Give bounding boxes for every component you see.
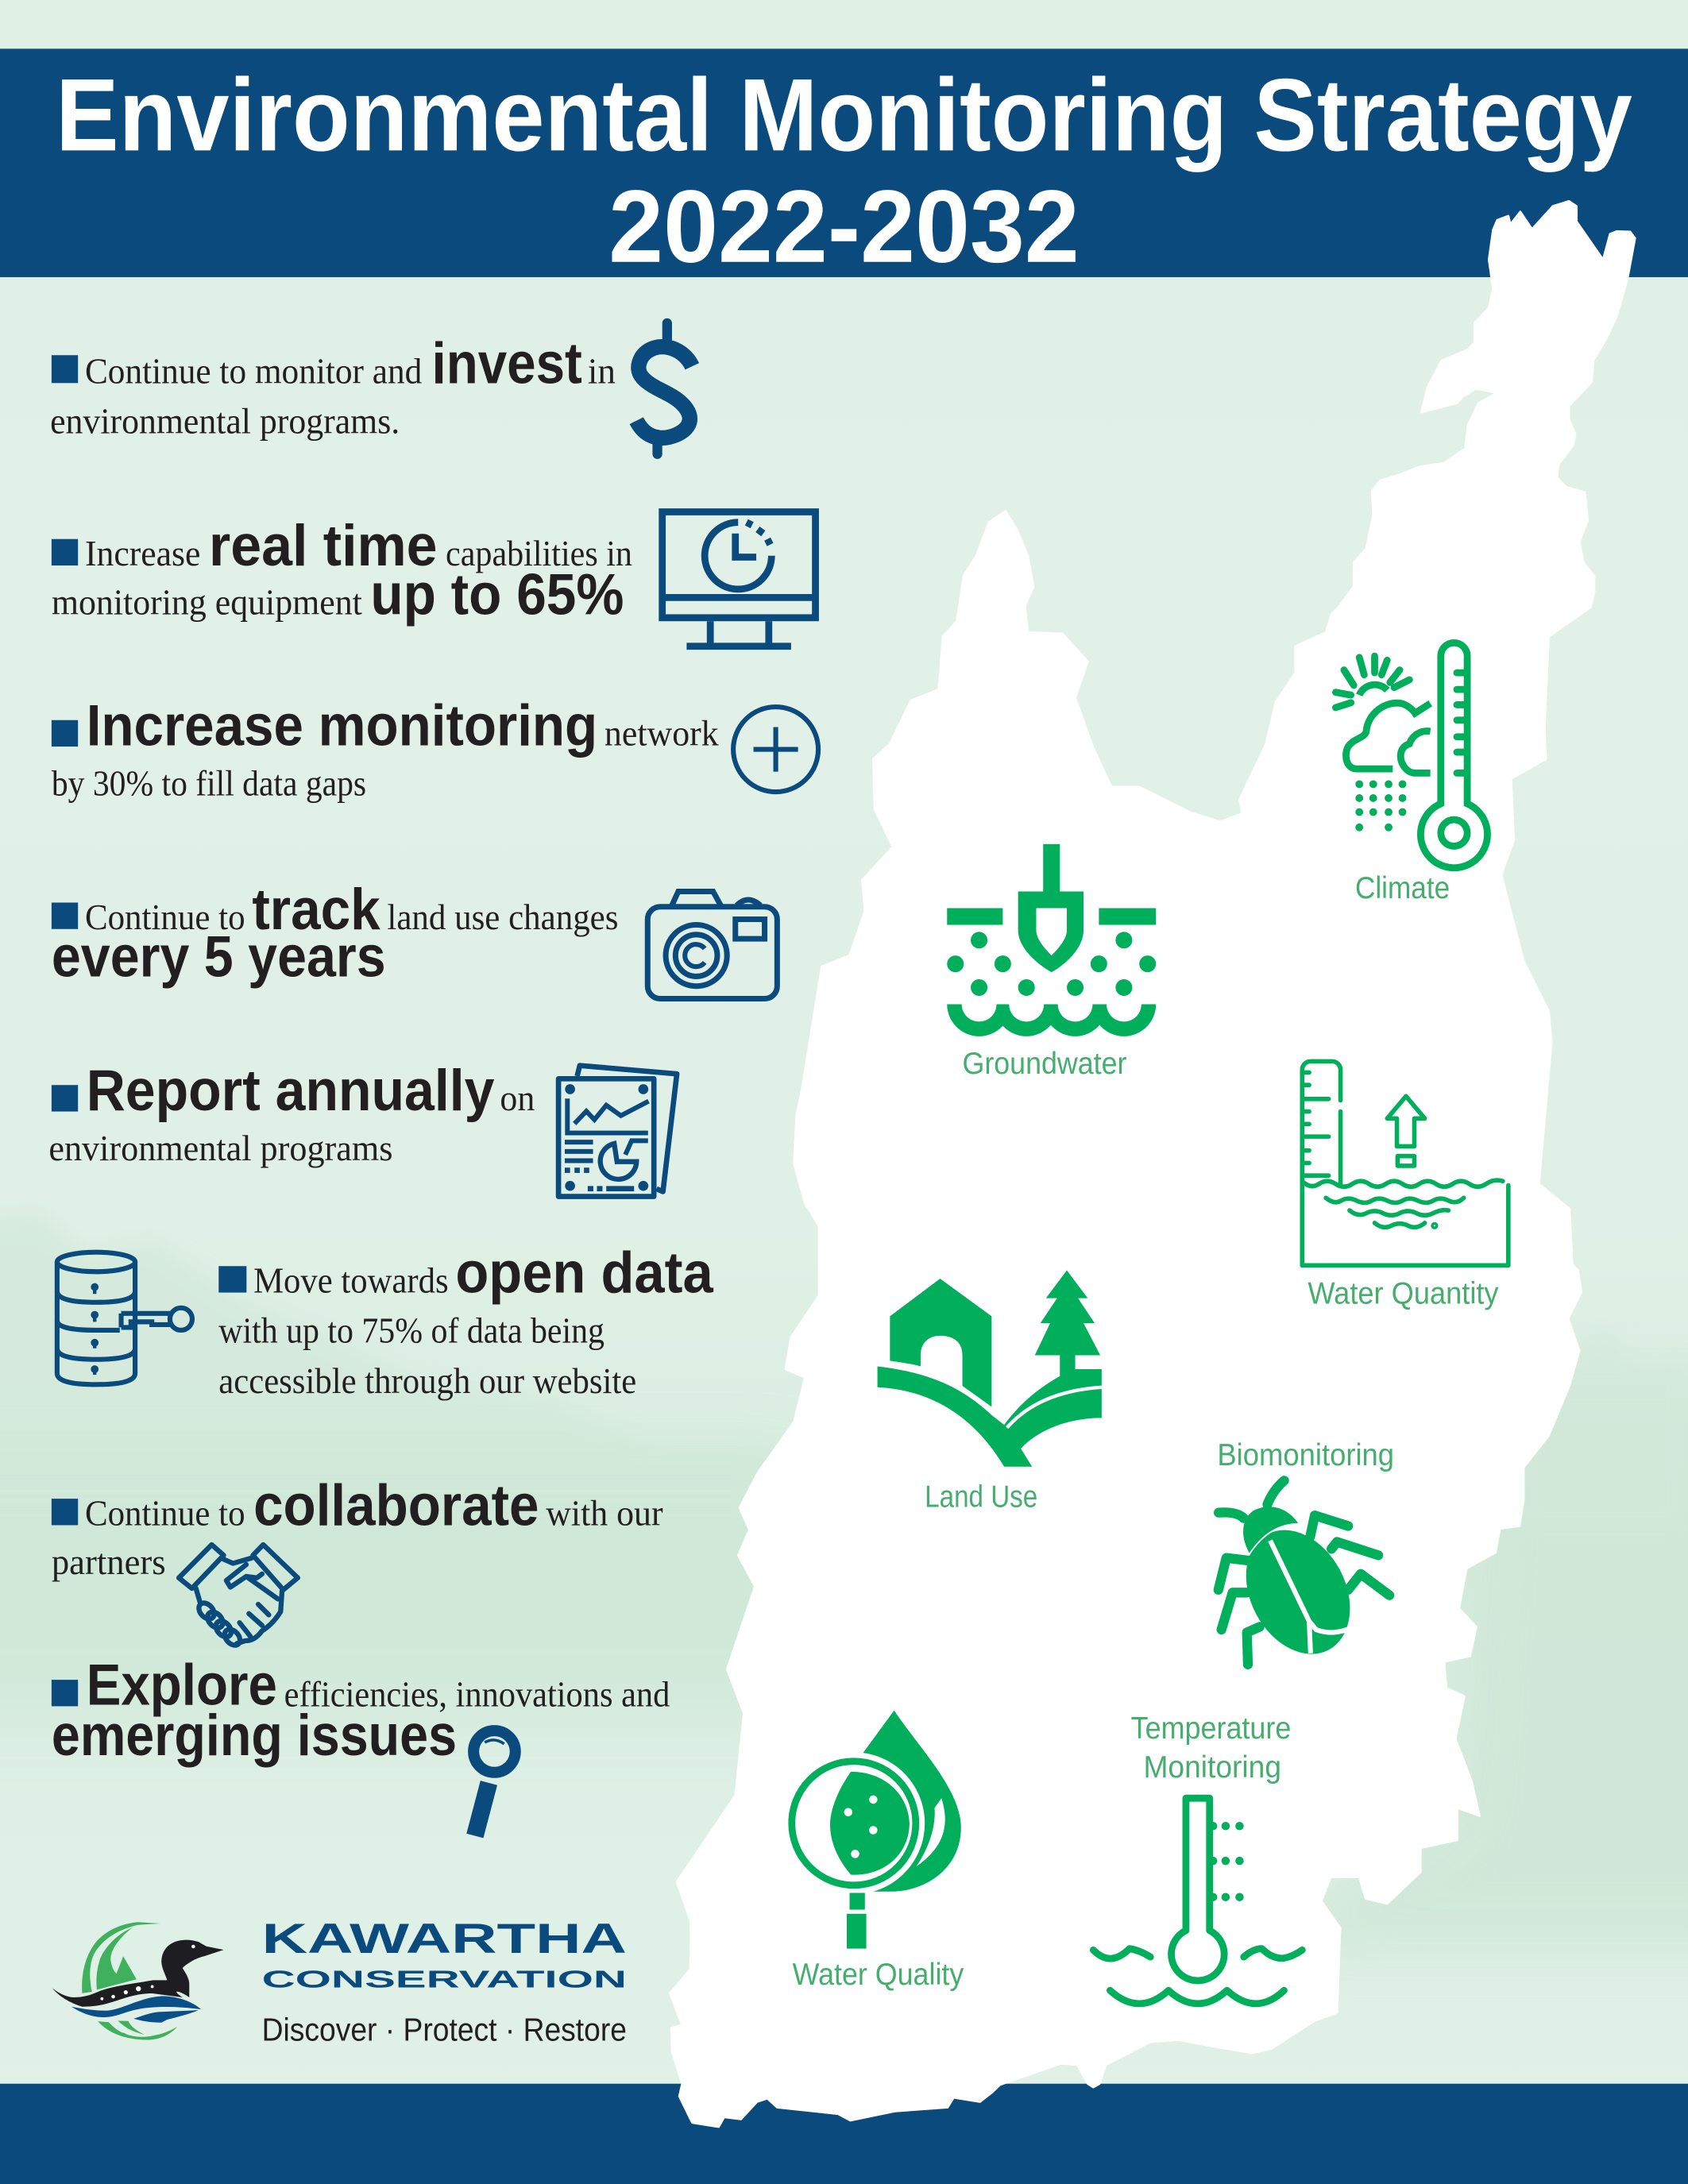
white watershed map [670, 201, 1635, 2127]
item: invest: in [588, 350, 616, 391]
logo: wordmark: KAWARTHA [262, 1916, 627, 1962]
item: increase monitoring: network [605, 712, 719, 753]
item: increase monitoring [52, 692, 719, 803]
icon: climate [1335, 642, 1488, 868]
label: temperature monitoring: Monitoring [1143, 1750, 1281, 1785]
logo: wordmark [262, 1916, 627, 2047]
icon: land use [878, 1270, 1102, 1467]
item: open data [218, 1240, 714, 1401]
icon: report pages [558, 1066, 677, 1197]
item: collaborate: Continue to [85, 1492, 245, 1533]
item: report annually: environmental programs [48, 1128, 392, 1168]
item: open data: open data [455, 1240, 714, 1306]
label: groundwater: Groundwater [963, 1047, 1127, 1081]
item: track: track [252, 876, 381, 942]
logo: loon [52, 1922, 224, 2040]
label: temperature monitoring: Temperature [1131, 1711, 1291, 1746]
item: explore: emerging issues [52, 1702, 457, 1768]
item: track: land use changes [387, 897, 618, 937]
item: explore: efficiencies, innovations and [284, 1673, 670, 1714]
item: collaborate [52, 1472, 663, 1582]
icon: temperature monitoring [1093, 1798, 1302, 2004]
label: land use: Land Use [925, 1480, 1037, 1515]
item: real time: Increase [85, 533, 200, 573]
item: real time [52, 512, 632, 627]
logo: wordmark: CONSERVATION [262, 1966, 627, 1993]
item: real time: up to 65% [370, 561, 624, 627]
item: increase monitoring: by 30% to fill data gaps [52, 762, 366, 803]
icon: magnifying glass [473, 1731, 516, 1836]
icon: water quantity [1302, 1061, 1508, 1265]
footer band [0, 2084, 1688, 2184]
item: real time: real time [209, 512, 438, 578]
label: climate: Climate [1355, 871, 1450, 905]
icon: database key [57, 1252, 192, 1384]
item: real time: monitoring equipment [52, 581, 362, 622]
icon: camera [647, 891, 777, 998]
icon: dollar sign [636, 323, 692, 454]
label: water quantity: Water Quantity [1308, 1277, 1499, 1311]
icon: monitor clock [662, 512, 816, 646]
item: collaborate: partners [52, 1542, 166, 1582]
icon: beetle [1219, 1480, 1389, 1672]
item: track: every 5 years [52, 923, 386, 989]
item: collaborate: collaborate [253, 1472, 539, 1538]
item: open data: accessible through our website [218, 1360, 636, 1401]
icon: water quality [782, 1711, 961, 1949]
item: open data: with up to 75% of data being [218, 1310, 605, 1351]
icon: plus circle [733, 707, 818, 792]
label: temperature monitoring [1131, 1711, 1291, 1785]
title: 2022-2032 [608, 170, 1080, 284]
item: explore: Explore [87, 1652, 277, 1718]
item: report annually: on [500, 1078, 535, 1118]
logo: wordmark: Discover · Protect · Restore [262, 2011, 627, 2047]
title [56, 58, 1632, 284]
label: biomonitoring: Biomonitoring [1217, 1438, 1394, 1472]
item: open data: Move towards [253, 1260, 449, 1301]
top banner [0, 48, 1688, 277]
item: invest [50, 330, 616, 441]
item: report annually: Report annually [87, 1057, 494, 1123]
item: report annually [48, 1057, 535, 1168]
item: collaborate: with our [546, 1492, 663, 1533]
item: track: Continue to [85, 897, 245, 937]
label: water quality: Water Quality [793, 1958, 964, 1992]
item: track [52, 876, 618, 989]
item: real time: capabilities in [446, 533, 632, 573]
item: invest: Continue to monitor and [85, 350, 422, 391]
item: increase monitoring: Increase monitoring [87, 692, 597, 758]
item: invest: environmental programs. [50, 400, 400, 441]
item: explore [52, 1652, 670, 1768]
icon: handshake [179, 1545, 298, 1648]
item: invest: invest [432, 330, 582, 396]
icon: groundwater [947, 844, 1156, 1036]
